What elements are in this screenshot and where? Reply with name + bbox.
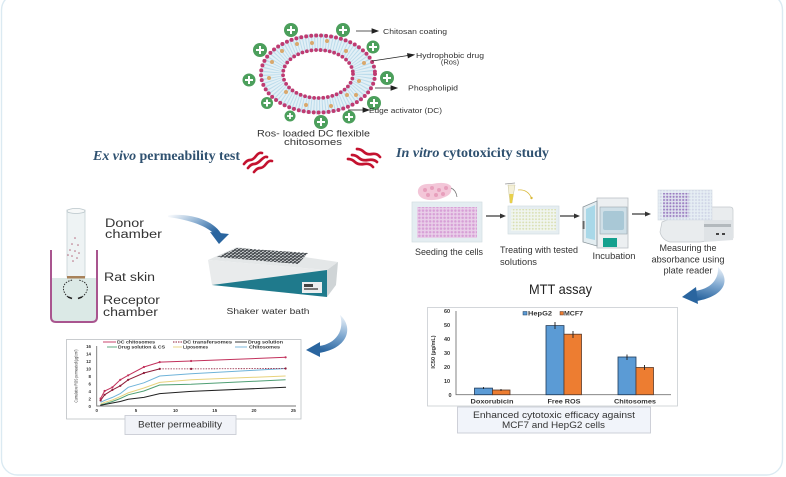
label: Incubation <box>592 251 636 261</box>
arrow: to permeability chart <box>306 315 347 357</box>
x tick labels: 0 <box>95 408 98 413</box>
drug molecules <box>267 39 366 108</box>
callout: better permeability <box>125 416 236 434</box>
donor tube <box>67 208 85 277</box>
annotation arrows <box>348 29 414 112</box>
labels: diffusion cell: chamber <box>103 307 158 319</box>
y tick labels: 10 <box>444 379 450 385</box>
bar chart: IC50 <box>428 308 678 406</box>
chart legend: Drug solution & CS <box>118 345 165 350</box>
y tick labels <box>86 344 92 409</box>
workflow: plate reader <box>652 190 733 276</box>
labels: diffusion cell: chamber <box>105 229 162 241</box>
icon: incubator <box>582 198 628 248</box>
series: DC chitosomes <box>100 356 287 400</box>
y tick labels: 8 <box>89 374 92 379</box>
annotation labels: Edge activator (DC) <box>369 106 443 115</box>
error bars <box>484 322 644 391</box>
y tick labels: 12 <box>86 359 92 364</box>
label <box>500 245 578 267</box>
heading: MTT assay: MTT assay <box>529 281 592 297</box>
arrow: to bar chart <box>682 267 725 304</box>
y tick labels: 20 <box>444 365 450 371</box>
arrow: treating to incubation <box>560 214 580 218</box>
y tick labels: 0 <box>448 393 452 399</box>
arrow: to water bath <box>168 215 229 244</box>
annotation labels: Chitosan coating <box>383 27 447 36</box>
icon: yellow well plate <box>508 206 559 234</box>
callout: enhanced cytotoxic efficacy: MCF7 and HepG2 cells <box>502 420 606 430</box>
chart legend: Liposomes <box>183 345 209 350</box>
workflow: seeding the cells <box>412 183 483 257</box>
bar legend: HepG2 <box>528 312 553 318</box>
y tick labels: 16 <box>86 344 92 349</box>
lipid bilayer <box>260 35 376 113</box>
x tick labels: 25 <box>291 408 296 413</box>
icon: red waves right <box>348 149 380 167</box>
y tick labels: 60 <box>444 309 450 315</box>
x tick labels: 10 <box>173 408 178 413</box>
workflow: incubation <box>582 198 636 261</box>
annotation labels <box>369 27 484 115</box>
axes <box>97 346 296 406</box>
icon: pink well plate <box>412 202 482 242</box>
label: solutions <box>500 257 538 267</box>
x tick labels <box>95 408 296 413</box>
category labels: Free ROS <box>548 400 580 406</box>
y tick labels: 30 <box>444 351 450 357</box>
vesicle caption: chitosomes <box>284 137 343 147</box>
callout: better permeability: Better permeability <box>138 420 222 430</box>
y axis title: IC50 (µg/mL) <box>431 335 437 369</box>
bar legend <box>523 312 584 318</box>
labels: diffusion cell: Receptor <box>103 295 160 307</box>
chart frame <box>66 340 301 419</box>
callout: enhanced cytotoxic efficacy: Enhanced cytotoxic efficacy against <box>473 410 636 420</box>
orange bars <box>492 334 654 395</box>
series: drug solution <box>101 387 286 405</box>
icon: shaker water bath <box>208 247 338 297</box>
labels: diffusion cell: Donor <box>105 218 144 230</box>
label: plate reader <box>664 266 712 276</box>
chart legend <box>103 340 283 350</box>
icon: pipette tube <box>505 183 533 203</box>
series: liposomes <box>101 376 286 404</box>
rat skin <box>67 276 85 278</box>
stirring arrows <box>63 280 87 298</box>
labels: diffusion cell: Rat skin <box>104 272 155 284</box>
y tick labels <box>444 309 452 399</box>
diagram: Franz diffusion cell <box>51 208 97 322</box>
chitosan plus charges <box>242 23 394 129</box>
category labels <box>470 400 657 406</box>
chart legend: DC transfersomes <box>183 340 233 345</box>
label <box>652 243 724 276</box>
series: drug solution and CS <box>101 380 286 405</box>
label: Treating with tested <box>500 245 578 255</box>
icon: purple well plate <box>658 190 712 220</box>
chart legend: Drug solution <box>248 340 283 345</box>
blue bars <box>474 326 636 395</box>
receptor beaker <box>51 250 97 322</box>
x tick labels: 20 <box>252 408 257 413</box>
vesicle caption <box>257 128 370 147</box>
label: absorbance using <box>652 254 724 264</box>
chart frame <box>428 308 678 406</box>
workflow: treating <box>500 183 578 267</box>
chart legend: DC chitosomes <box>117 340 156 345</box>
y tick labels: 14 <box>86 352 92 356</box>
heading: ex vivo: Ex vivo permeability test <box>92 149 240 164</box>
axes <box>456 311 671 395</box>
label: shaker water bath: Shaker water bath <box>226 307 310 316</box>
vesicle caption: Ros- loaded DC flexible <box>257 128 370 138</box>
y tick labels: 10 <box>86 366 92 372</box>
chart legend: Chitosomes <box>249 345 281 350</box>
y axis title: Cumulative ROS permeated (µg/cm²) <box>74 349 78 402</box>
y tick labels: 6 <box>89 382 92 386</box>
annotation labels: Phospholipid <box>408 84 458 92</box>
arrow: incubation to reader <box>632 212 651 216</box>
callout: enhanced cytotoxic efficacy <box>458 407 650 433</box>
line chart: permeation <box>66 340 301 419</box>
category labels: Chitosomes <box>614 400 657 406</box>
receptor liquid <box>51 278 97 321</box>
annotation labels: (Ros) <box>441 58 460 66</box>
y tick labels: 40 <box>444 337 450 343</box>
heading: in vitro: In vitro cytotoxicity study <box>395 146 549 161</box>
labels: diffusion cell <box>103 218 162 319</box>
annotation labels: Hydrophobic drug <box>416 51 484 60</box>
y tick labels: 50 <box>444 323 450 329</box>
x tick labels: 15 <box>212 408 218 413</box>
icon: cell culture <box>418 183 457 200</box>
y tick labels: 0 <box>89 404 92 409</box>
label: Seeding the cells <box>415 247 483 257</box>
bar legend: MCF7 <box>564 312 584 318</box>
series: DC transfersomes <box>100 367 287 402</box>
y tick labels: 4 <box>89 389 92 394</box>
x tick labels: 5 <box>135 408 138 413</box>
icon: plate reader <box>660 207 733 242</box>
diagram: chitosome vesicle <box>242 23 484 147</box>
label: Measuring the <box>660 243 716 253</box>
series: chitosomes <box>101 368 286 402</box>
arrow: seeding to treating <box>486 214 506 218</box>
y tick labels: 2 <box>89 396 92 402</box>
icon: red waves left <box>244 153 272 172</box>
category labels: Doxorubicin <box>470 400 514 406</box>
